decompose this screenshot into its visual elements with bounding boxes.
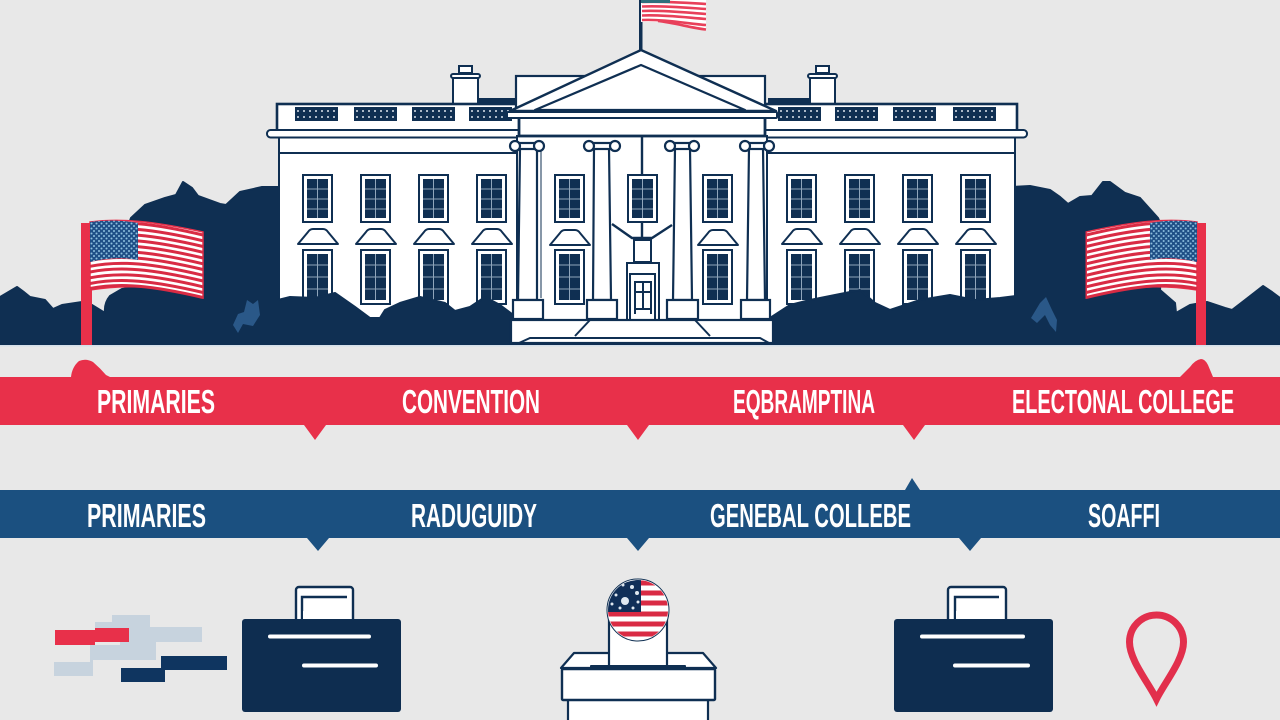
flag: right <box>1086 220 1206 345</box>
blue timeline banner <box>0 478 1280 551</box>
lower windows <box>303 250 990 304</box>
ballot slip <box>948 587 1006 629</box>
back block of portico <box>516 76 765 112</box>
label: convention: CONVENTION <box>402 383 540 420</box>
right flag cloth <box>1086 220 1197 298</box>
columns <box>510 141 774 319</box>
icon: ballot box with flag <box>561 579 716 720</box>
box body front <box>562 669 715 700</box>
walls <box>279 136 1015 345</box>
box lines <box>922 636 1028 666</box>
rooftop flag pole <box>639 0 642 50</box>
label: primaries: PRIMARIES <box>87 497 206 534</box>
portico wall <box>517 136 767 320</box>
shrubs in front <box>278 290 1016 345</box>
chimneys <box>451 66 837 104</box>
icon: ballot box left <box>242 587 401 712</box>
balustrades <box>295 107 996 121</box>
treeline: left <box>0 182 282 345</box>
slip base <box>303 611 350 619</box>
central line and door canopy <box>612 137 672 238</box>
cornice band <box>507 112 777 118</box>
left flag pole <box>81 223 92 345</box>
entablature <box>519 116 765 136</box>
portico windows <box>550 175 738 304</box>
box body <box>894 619 1053 712</box>
icon: location pin <box>1130 615 1184 699</box>
label: primaries: PRIMARIES <box>97 383 215 420</box>
flag: left <box>81 220 203 345</box>
red ribbon shape <box>0 359 1280 440</box>
pediment <box>510 50 776 111</box>
box lines <box>270 636 376 666</box>
window lintels <box>298 229 996 244</box>
label: soaffi: SOAFFI <box>1088 497 1160 534</box>
building: White House <box>267 0 1027 345</box>
frieze line <box>279 152 1015 154</box>
treeline: right <box>1012 182 1280 345</box>
box body lower <box>568 698 708 720</box>
ground line <box>0 345 1280 346</box>
attic <box>277 104 1017 131</box>
label: eqbramptina: EQBRAMPTINA <box>733 383 875 420</box>
upper windows <box>303 175 990 222</box>
blue foliage accents <box>233 297 1057 333</box>
ballot slip <box>296 587 353 629</box>
flag circle <box>607 579 670 641</box>
right flag pole <box>1196 223 1206 345</box>
slip base <box>956 611 1003 619</box>
icon: ballot box right <box>894 587 1053 712</box>
box back lid <box>561 653 716 668</box>
left flag cloth <box>90 220 203 298</box>
steps <box>511 320 773 343</box>
red timeline banner <box>0 359 1280 440</box>
icon: motion flag stripes <box>54 615 227 682</box>
label: raduguidy: RADUGUIDY <box>411 497 537 534</box>
cornice <box>267 130 1027 138</box>
label: genebal collebe: GENEBAL COLLEBE <box>710 497 911 534</box>
blue ribbon shape <box>0 478 1280 551</box>
rooftop flag <box>641 0 706 30</box>
front door <box>627 240 659 320</box>
ballot slip <box>609 615 667 667</box>
box body <box>242 619 401 712</box>
rooftop rail behind chimneys <box>478 98 810 104</box>
slot <box>590 665 686 669</box>
